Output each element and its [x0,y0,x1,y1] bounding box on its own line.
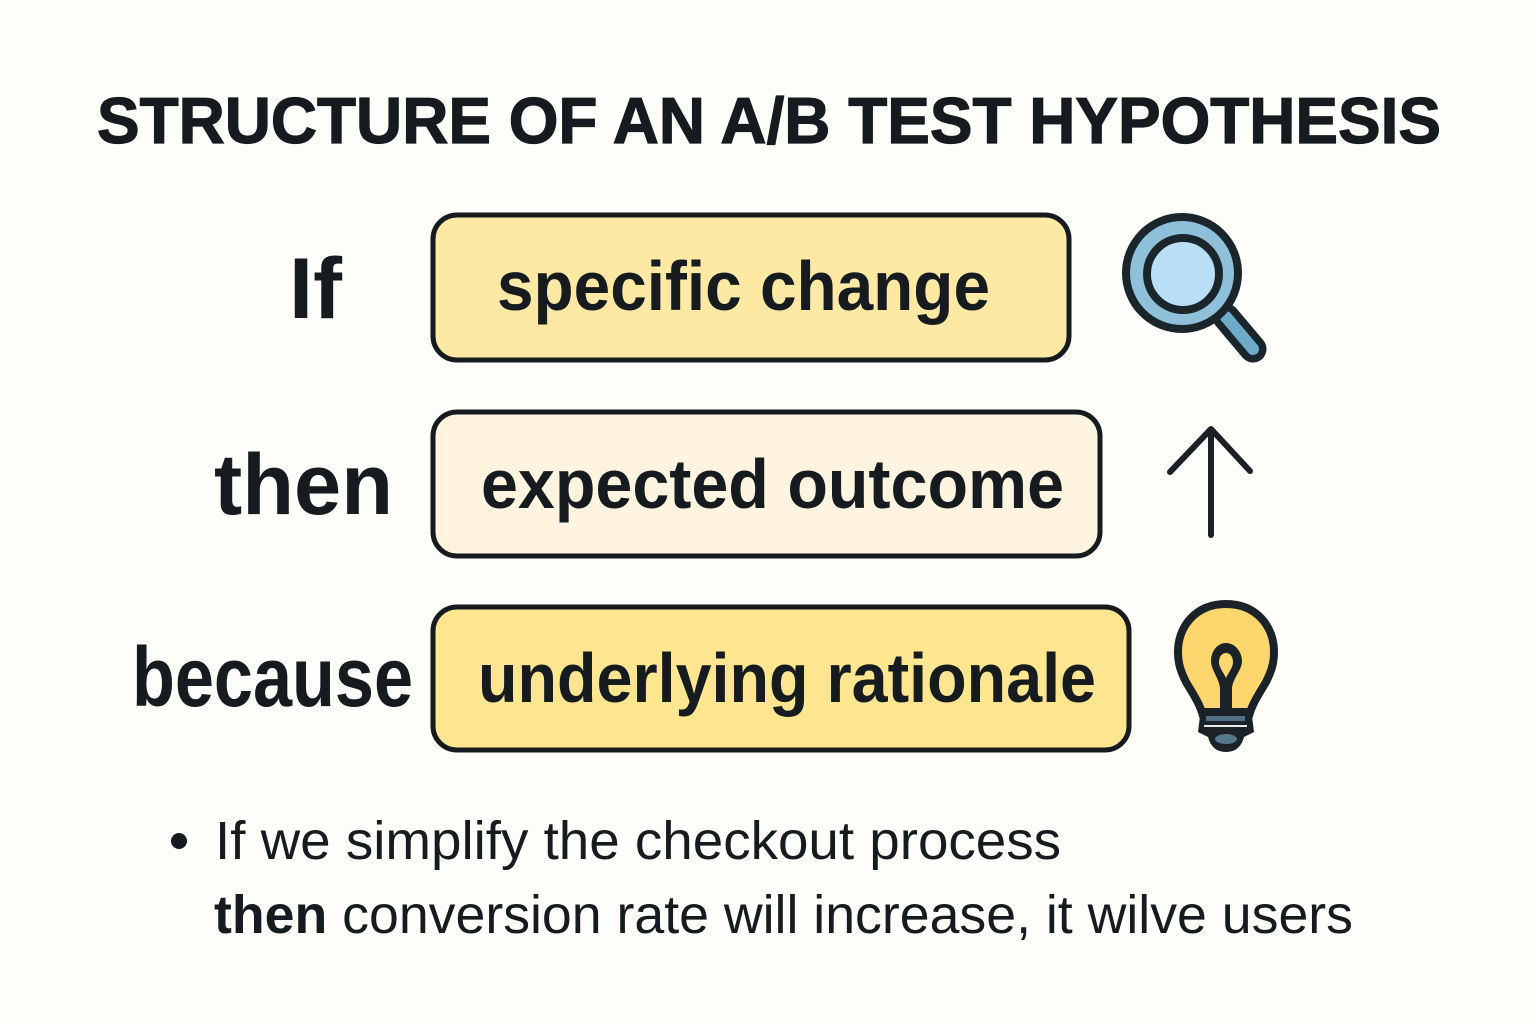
panel: underlying rationale: underlying rationale [478,639,1096,717]
title: STRUCTURE OF AN A/B TEST HYPOTHESIS [97,84,1441,157]
panel: underlying rationale [433,607,1129,750]
panel: expected outcome: expected outcome [481,445,1064,523]
example line 1: If we simplify the checkout process [215,811,1061,871]
icon: up arrow [1170,429,1250,535]
example line 2: then conversion rate will increase, it wilve users [214,885,1353,945]
icon: magnifying glass [1126,217,1253,349]
bullet point [171,833,187,849]
row label: then: then [214,437,393,533]
panel: specific change: specific change [497,247,990,325]
row label: If: If [289,241,342,337]
row label: because: because [132,630,413,724]
panel: specific change [433,215,1069,360]
icon: light bulb [1178,604,1274,752]
panel: expected outcome [433,412,1100,556]
